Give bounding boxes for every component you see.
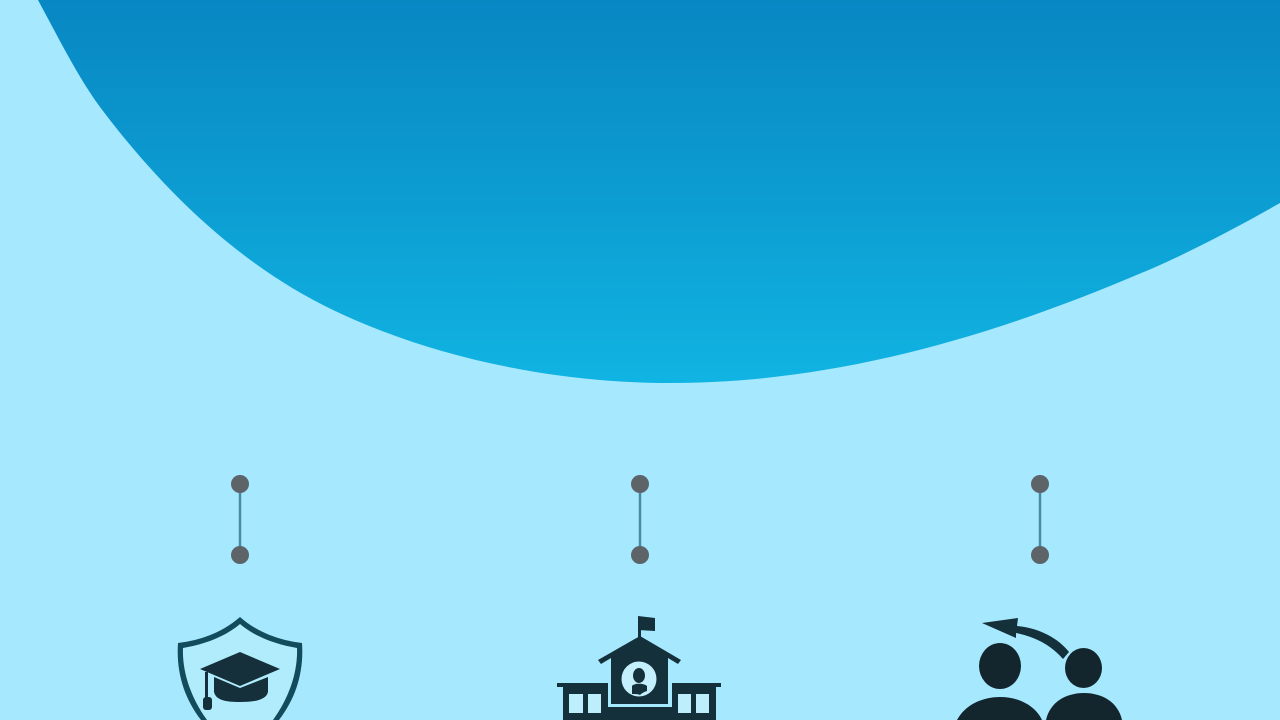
icon: two people with arrow (957, 618, 1122, 720)
icon: shield with graduation cap (178, 617, 302, 720)
panel: blue header blob (38, 0, 1280, 383)
connector: right (1031, 475, 1049, 564)
connector: left (231, 475, 249, 564)
icon: school building (557, 616, 721, 720)
connector: center (631, 475, 649, 564)
